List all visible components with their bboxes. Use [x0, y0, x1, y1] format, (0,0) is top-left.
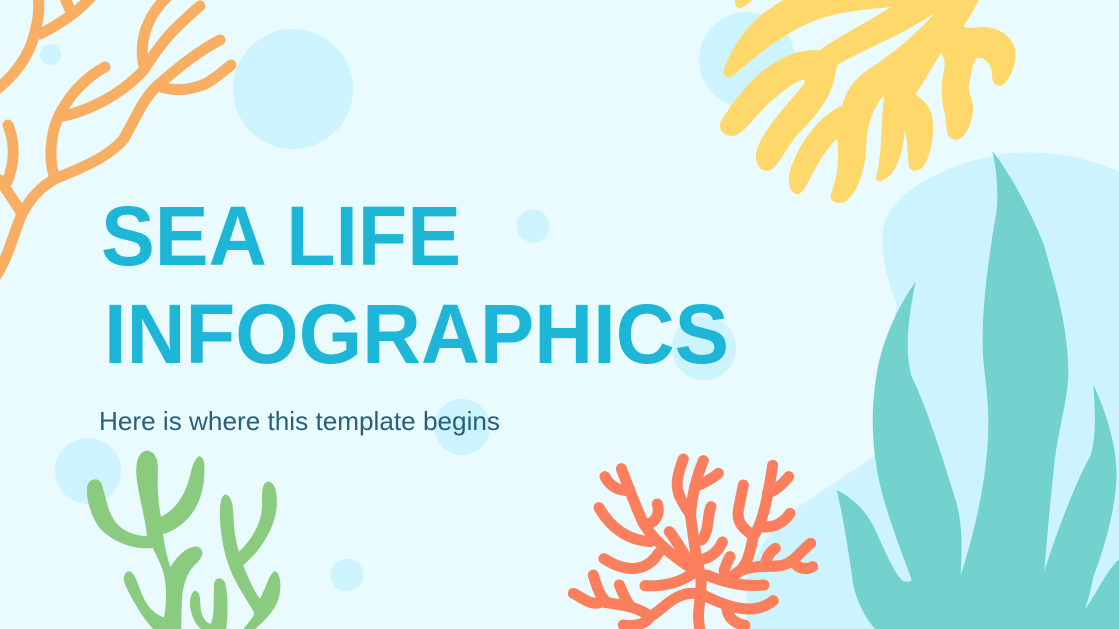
- icon: teal seaweed: [837, 151, 1119, 629]
- icon: coral red coral: [573, 459, 813, 629]
- icon: yellow seaweed: [722, 0, 1014, 201]
- icon: orange branching coral: [0, 0, 231, 276]
- pale blue blob behind seaweed: [747, 152, 1119, 629]
- bubbles: [40, 12, 795, 592]
- title: [101, 189, 729, 381]
- icon: green coral: [88, 452, 279, 629]
- subtitle: Here is where this template begins: [99, 406, 500, 436]
- title line 2: INFOGRAPHICS: [104, 287, 729, 381]
- title line 1: SEA LIFE: [101, 189, 461, 283]
